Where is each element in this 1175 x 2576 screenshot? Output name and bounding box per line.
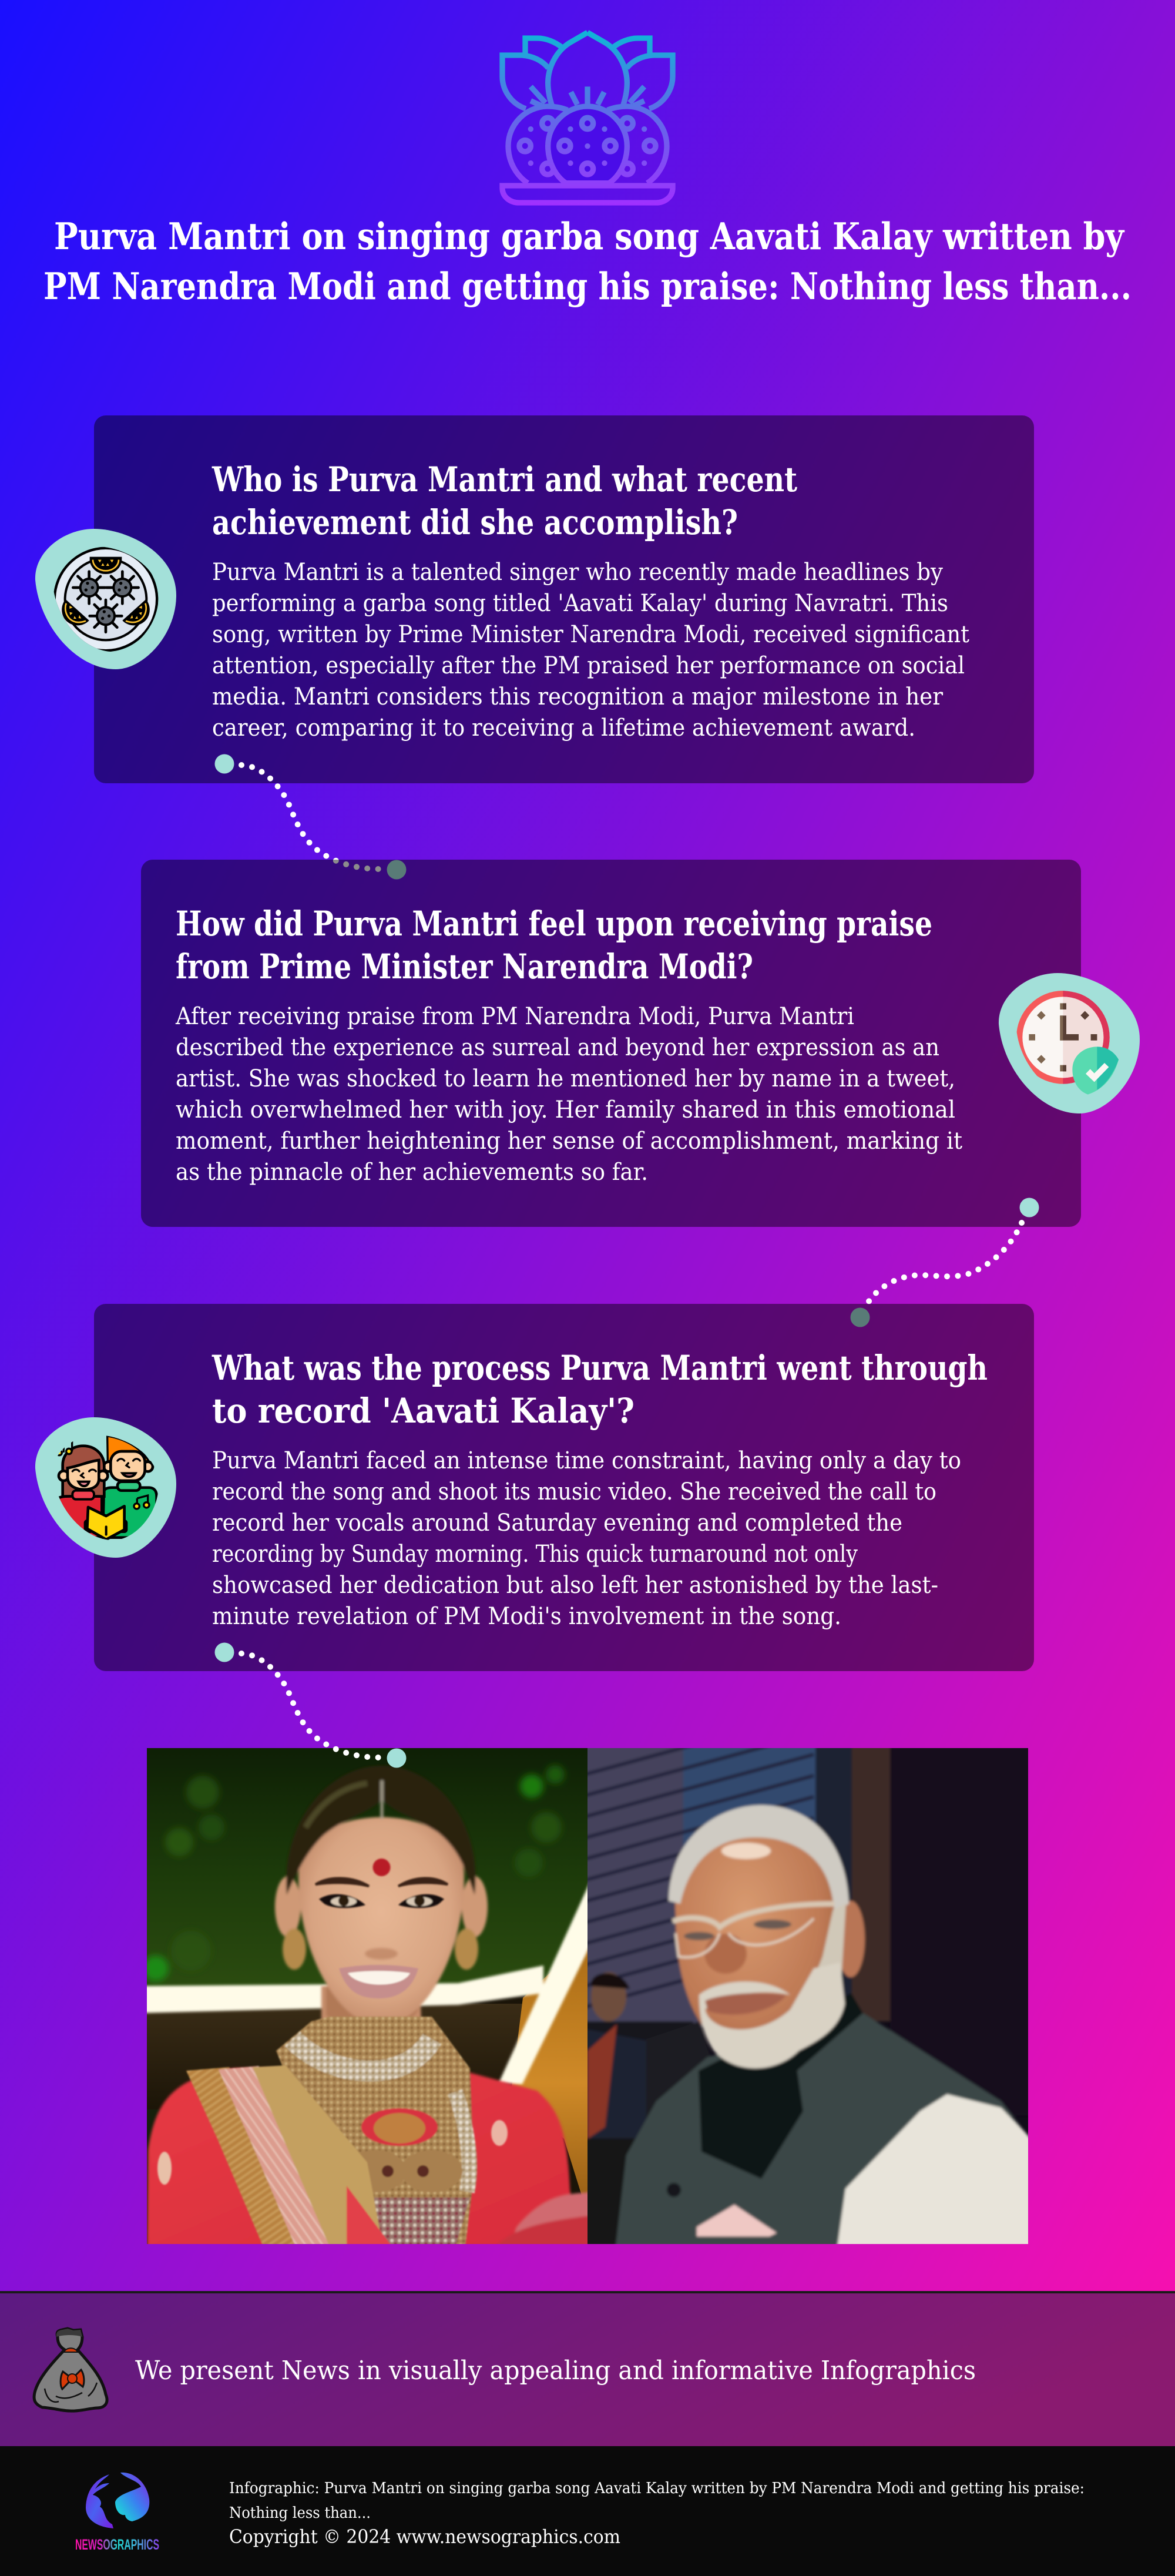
connector: dotted curve 3 — [215, 1643, 407, 1767]
body text — [212, 1447, 961, 1630]
body text: which overwhelmed her with joy. Her family shared in this emotional — [176, 1096, 955, 1123]
panel: recording process — [35, 1304, 1034, 1671]
body text: Purva Mantri faced an intense time constraint, having only a day to — [212, 1447, 961, 1474]
body text: recording by Sunday morning. This quick turnaround not only — [212, 1541, 858, 1568]
heading: achievement did she accomplish? — [212, 502, 738, 542]
footer text: Nothing less than... — [229, 2504, 371, 2522]
body text: showcased her dedication but also left her astonished by the last- — [212, 1572, 938, 1599]
heading: What was the process Purva Mantri went through — [212, 1348, 988, 1388]
body text: record her vocals around Saturday evening and completed the — [212, 1510, 902, 1537]
body text: song, written by Prime Minister Narendra Modi, received significant — [212, 621, 969, 648]
footer text: Infographic: Purva Mantri on singing garba song Aavati Kalay written by PM Narendra Modi and getting his praise: — [229, 2480, 1085, 2497]
body text: media. Mantri considers this recognition a major milestone in her — [212, 683, 944, 710]
title — [43, 214, 1132, 308]
heading — [212, 1348, 988, 1431]
panel: who is Purva Mantri — [35, 415, 1034, 783]
panel: how she felt — [0, 860, 1175, 2576]
photo: Purva Mantri — [141, 1748, 593, 2256]
photo: Narendra Modi — [576, 1712, 1040, 2256]
heading: How did Purva Mantri feel upon receiving praise — [176, 904, 932, 944]
banner text: We present News in visually appealing and informative Infographics — [135, 2356, 976, 2386]
icon: plate with fruit on blob — [35, 529, 176, 669]
banner — [0, 2293, 1175, 2446]
heading — [212, 459, 797, 542]
icon: lotus and fruit logo — [502, 32, 673, 203]
body text: artist. She was shocked to learn he mentioned her by name in a tweet, — [176, 1065, 955, 1092]
connector: dotted curve 1 — [215, 754, 407, 879]
body text: attention, especially after the PM praised her performance on social — [212, 652, 965, 679]
connector: dotted curve 2 — [851, 1198, 1039, 1327]
heading — [176, 904, 932, 987]
icon: two singers on blob — [35, 1417, 176, 1558]
neon bars — [141, 1874, 593, 2084]
body text: career, comparing it to receiving a lifetime achievement award. — [212, 715, 915, 742]
dress and face — [147, 1766, 593, 2256]
divider line — [0, 2291, 1175, 2293]
icon: sack with bow tie — [34, 2329, 107, 2411]
footer text — [229, 2480, 1085, 2548]
body text: After receiving praise from PM Narendra Modi, Purva Mantri — [175, 1003, 854, 1030]
body text: described the experience as surreal and beyond her expression as an — [176, 1034, 939, 1061]
body text — [175, 1003, 962, 1186]
heading: Who is Purva Mantri and what recent — [212, 459, 797, 499]
body text: moment, further heightening her sense of accomplishment, marking it — [176, 1128, 962, 1155]
icon: clock with check shield on blob — [999, 973, 1140, 1113]
body text: performing a garba song titled 'Aavati Kalay' during Navratri. This — [212, 590, 948, 617]
body text: as the pinnacle of her achievements so far. — [176, 1159, 648, 1186]
footer text: Copyright © 2024 www.newsographics.com — [229, 2525, 620, 2548]
necklace and sash — [157, 2017, 508, 2256]
body text: minute revelation of PM Modi's involvement in the song. — [212, 1603, 841, 1630]
body text: record the song and shoot its music video. She received the call to — [212, 1478, 936, 1505]
body text — [212, 559, 969, 742]
footer — [0, 2446, 1175, 2576]
logo wordmark: NEWSOGRAPHICS — [75, 2537, 159, 2553]
body text: Purva Mantri is a talented singer who recently made headlines by — [212, 559, 943, 586]
heading: to record 'Aavati Kalay'? — [212, 1391, 634, 1431]
logo: newsographics globe — [86, 2473, 149, 2528]
heading: from Prime Minister Narendra Modi? — [176, 947, 753, 987]
